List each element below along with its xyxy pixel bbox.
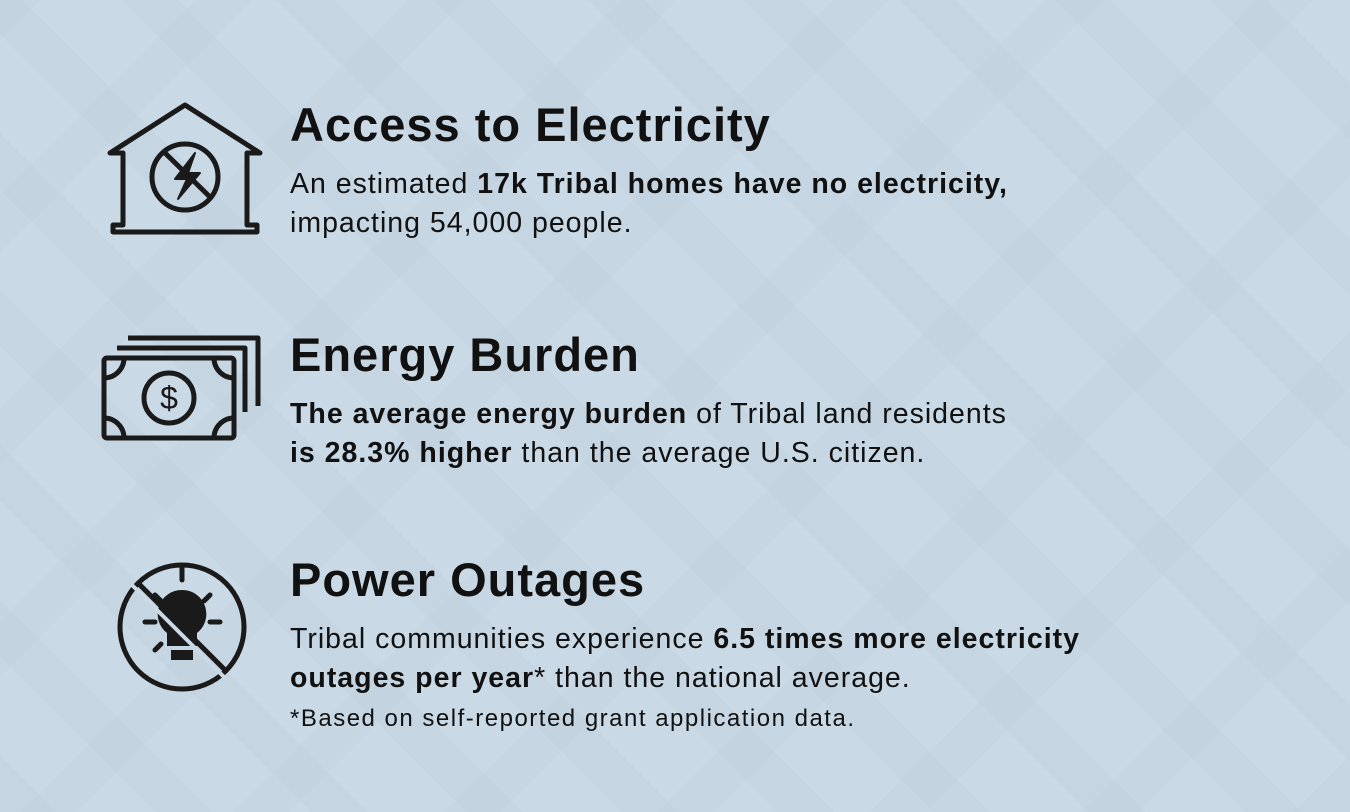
- text block: energy burden: [290, 398, 1007, 469]
- heading: access to electricity: Access to Electricity: [290, 98, 771, 151]
- text block: access: [290, 168, 1008, 239]
- text block: power outages: [290, 623, 1080, 694]
- icon: no lightbulb: [118, 562, 246, 692]
- text block: access: impacting 54,000 people.: [290, 207, 632, 239]
- heading: power outages: Power Outages: [290, 553, 645, 606]
- text block: energy burden: is 28.3% higher than the average U.S. citizen.: [290, 437, 925, 469]
- text block: energy burden: The average energy burden of Tribal land residents: [290, 398, 1007, 430]
- footnote: *Based on self-reported grant application data.: [290, 705, 856, 732]
- panel: access to electricity: [290, 98, 1008, 239]
- icon: money bills: $: [160, 380, 178, 416]
- text block: power outages: outages per year* than the national average.: [290, 662, 911, 694]
- icon: house with no electricity: [108, 102, 262, 234]
- panel: power outages: [290, 553, 1080, 732]
- panel: energy burden: [290, 328, 1007, 469]
- icon: money bills: [102, 336, 260, 440]
- text block: power outages: Tribal communities experience 6.5 times more electricity: [290, 623, 1080, 655]
- heading: energy burden: Energy Burden: [290, 328, 640, 381]
- text block: access: An estimated 17k Tribal homes have no electricity,: [290, 168, 1008, 200]
